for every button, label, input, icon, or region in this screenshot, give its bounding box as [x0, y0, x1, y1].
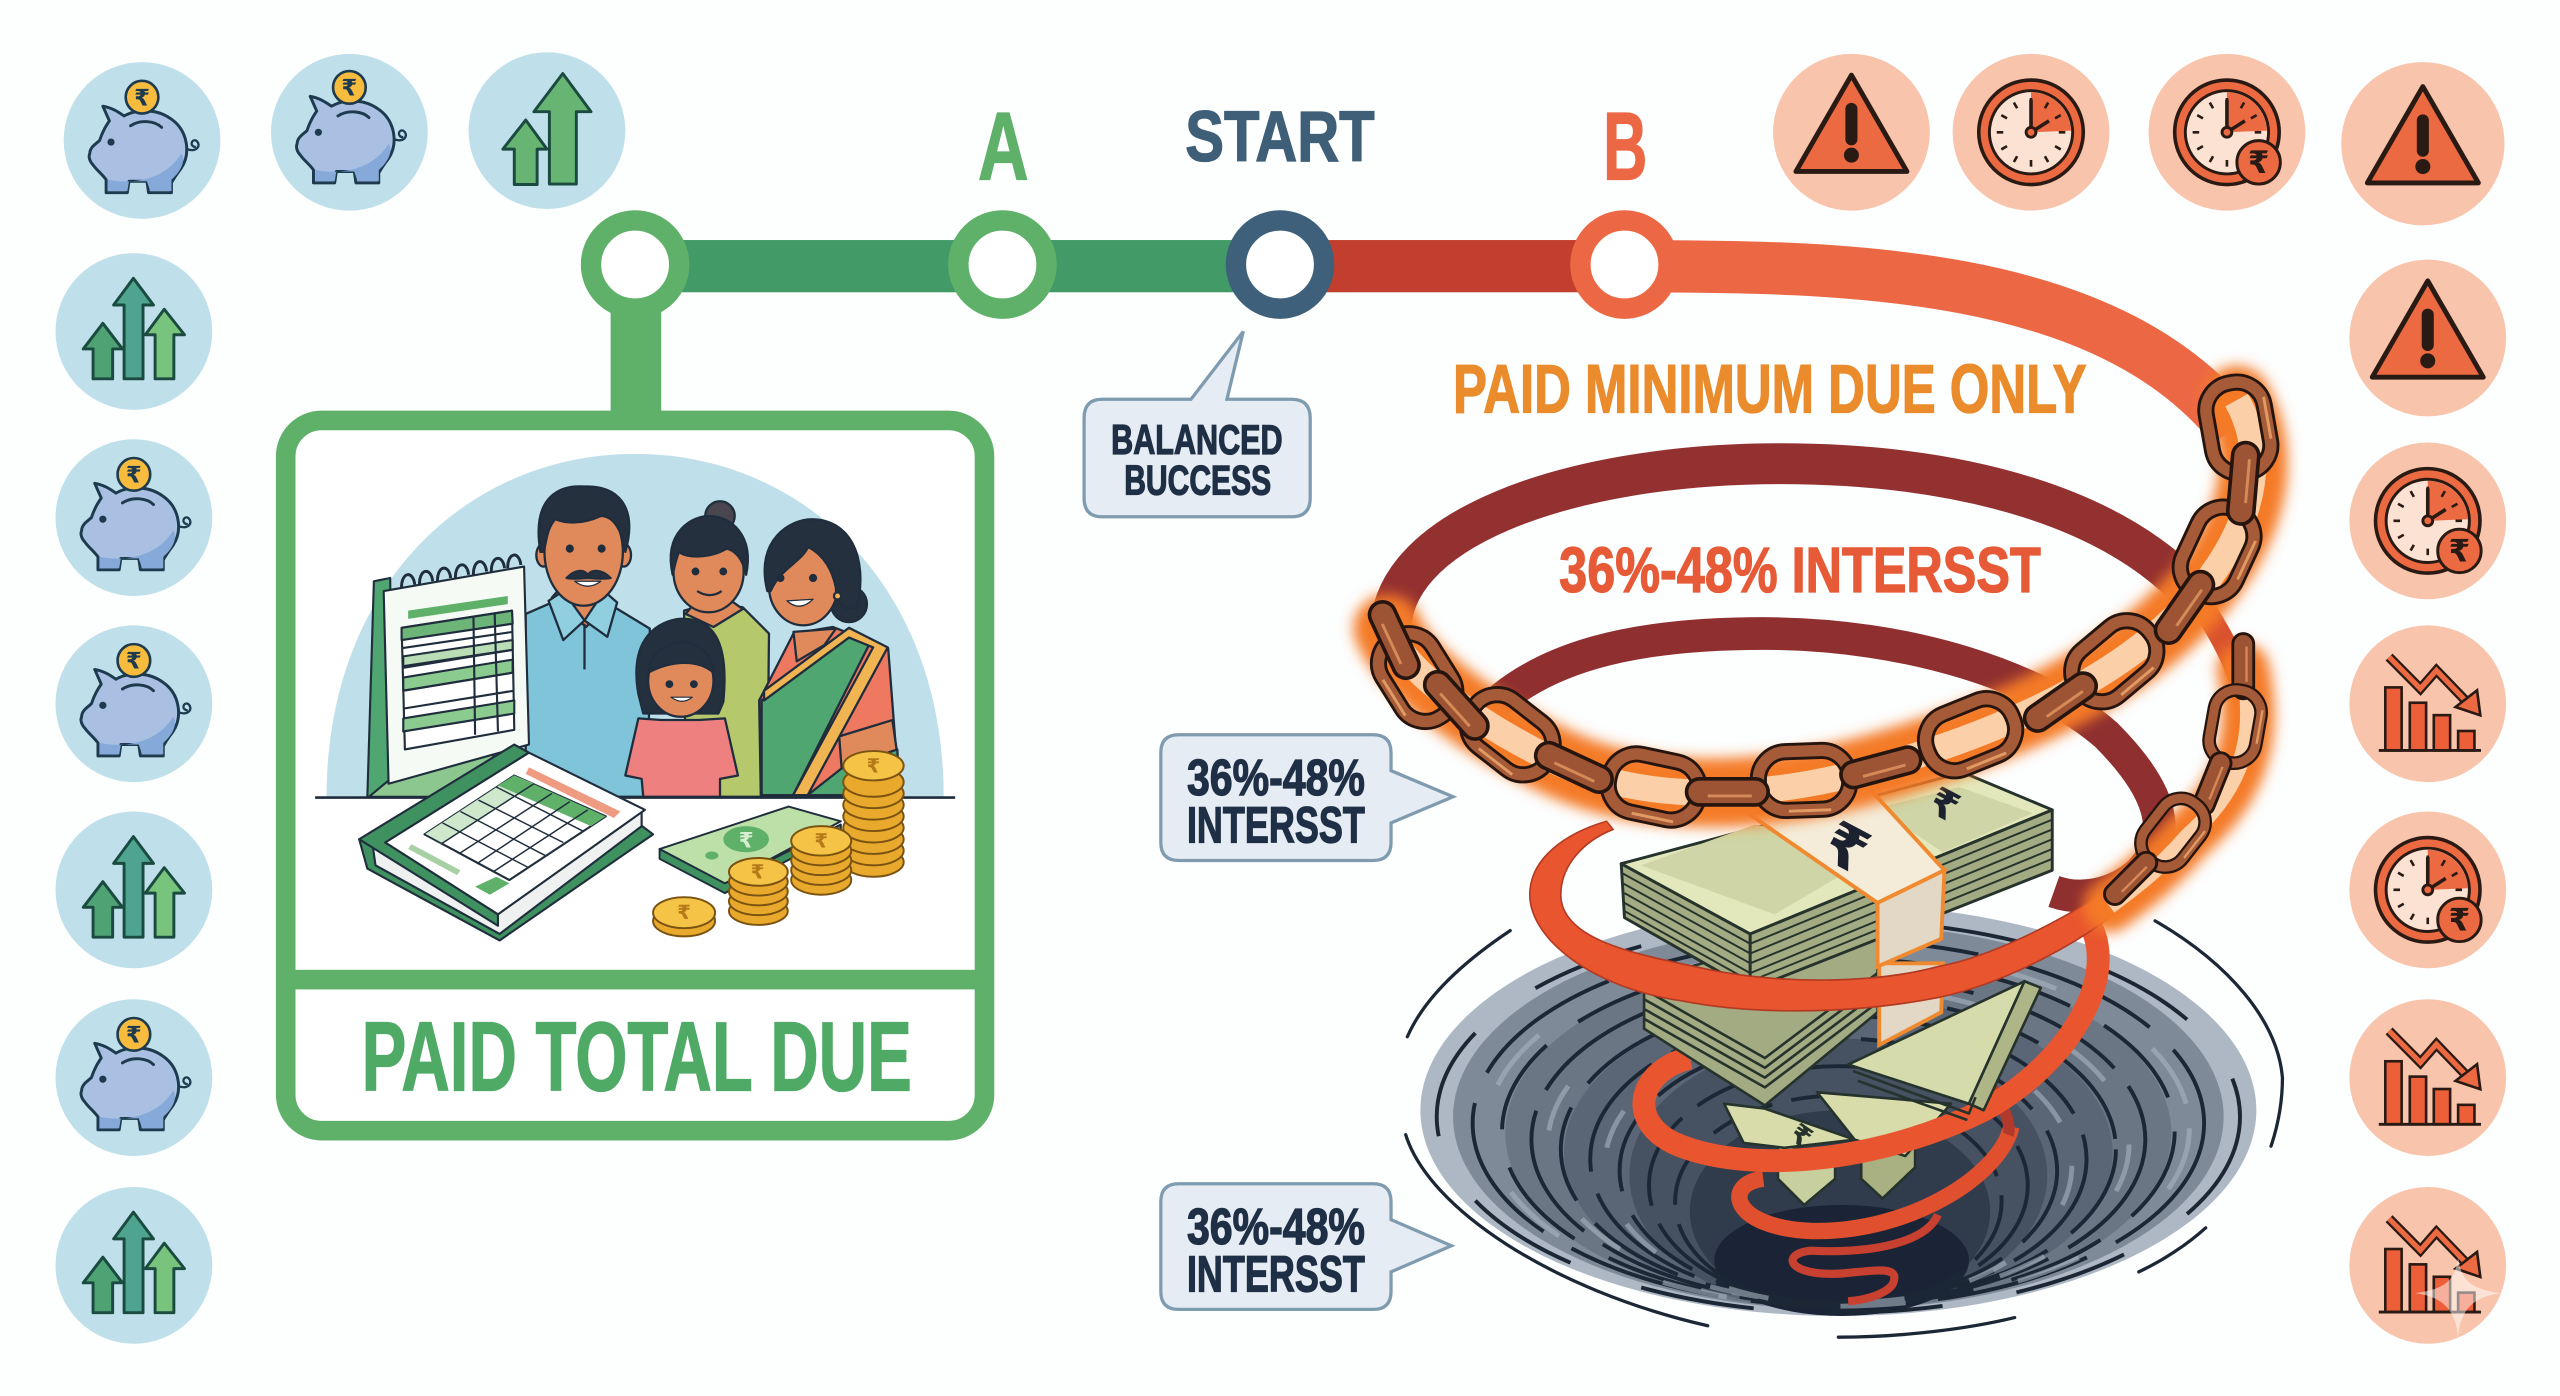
icons: left growth column [56, 52, 625, 1344]
panel frame [286, 420, 984, 1131]
coin rupee marks: ₹ [751, 861, 764, 883]
node: total due end [591, 220, 679, 309]
icon: falling bars 1 [2349, 625, 2506, 782]
heading: paid minimum due only: PAID MINIMUM DUE ONLY [1453, 350, 2087, 427]
icon: piggy bank 2: ₹ [341, 75, 357, 101]
illustration: ledger book [359, 745, 653, 940]
spiral: red strand behind chain [2196, 596, 2247, 735]
money: paper band with rupee: ₹ [1922, 780, 1966, 831]
icon: piggy bank 2 [271, 54, 428, 211]
icon: piggy bank 3 [56, 439, 212, 596]
money: lower loose notes: ₹ [1784, 1118, 1818, 1154]
callout: balanced success: BALANCED [1111, 416, 1283, 463]
icon: clock 1 [1953, 54, 2109, 211]
coin rupee marks: ₹ [867, 755, 880, 777]
spiral: dark red ring top [1391, 464, 2204, 640]
icon: growth arrows [56, 253, 212, 410]
label: START: START [1185, 97, 1375, 177]
money: middle stack [1644, 914, 2041, 1120]
spiral: bottom squiggle [1793, 1215, 1938, 1301]
icon: piggy bank 1: ₹ [134, 84, 150, 110]
money: paper band with rupee: ₹ [1813, 810, 1879, 886]
money: top stack [1621, 772, 2052, 989]
icon: piggy bank 5 [56, 999, 212, 1156]
watermark star [2415, 1257, 2501, 1337]
heading: interest rate: 36%-48% INTERSST [1559, 535, 2041, 606]
backdrop dome [327, 454, 944, 797]
icon: clock with rupee top [2149, 54, 2305, 211]
icon: clock with rupee 2: ₹ [2449, 534, 2470, 569]
connector: green drop to panel [611, 294, 661, 421]
icon: falling bars 2 [2349, 999, 2506, 1156]
spiral: second coil [1644, 914, 2098, 1161]
panel divider [286, 970, 984, 989]
spiral: lower coil [1739, 1127, 2011, 1231]
illustration: calendar [367, 555, 529, 797]
coin rupee marks [677, 755, 880, 924]
illustration: child [625, 619, 738, 797]
illustration: coin stacks [653, 751, 904, 936]
panel: paid total due [286, 420, 984, 1131]
money: lower loose notes [1724, 1092, 1951, 1205]
chain links main strand [1365, 378, 2276, 826]
path line: red segment [1280, 240, 1624, 292]
icon: growth arrows 2 [56, 811, 212, 968]
callout: interest upper [1161, 735, 1453, 860]
callout: interest upper: INTERSST [1187, 796, 1365, 853]
callout: interest lower: INTERSST [1187, 1245, 1365, 1302]
node: A [958, 220, 1047, 309]
icon: growth arrows 3 [56, 1187, 212, 1344]
icon: piggy bank 5: ₹ [126, 1021, 142, 1047]
money: band lower [1879, 963, 1943, 1045]
table edge [315, 797, 955, 799]
icon: piggy bank 4: ₹ [126, 648, 142, 674]
coin rupee marks: ₹ [677, 902, 691, 924]
icon: clock with rupee 2 [2349, 442, 2506, 599]
callout: interest upper: 36%-48% [1187, 749, 1365, 806]
icon: clock with rupee 3: ₹ [2449, 903, 2470, 938]
node: B [1580, 220, 1669, 309]
swirl motion lines [1406, 921, 2282, 1337]
chain [1365, 378, 2276, 909]
icon: warning 2 [2341, 62, 2504, 225]
illustration: teen daughter [671, 501, 769, 797]
node: start [1236, 220, 1324, 309]
icon: piggy bank 1 [64, 62, 220, 219]
callout: balanced success [1084, 331, 1310, 517]
callout: interest lower: 36%-48% [1187, 1198, 1365, 1255]
illustration: man [526, 486, 650, 797]
spiral: front orange ribbon [1530, 821, 2142, 1011]
illustration: banknotes [660, 807, 841, 893]
label: B: B [1603, 94, 1647, 201]
icon: clock with rupee top: ₹ [2248, 145, 2269, 180]
icons: right warning column [1773, 54, 2506, 1344]
path line: orange curve into the spiral [1624, 266, 2233, 428]
callout: interest lower [1161, 1184, 1451, 1309]
chain links second strand [2100, 634, 2265, 909]
coin rupee marks: ₹ [814, 830, 828, 852]
icon: piggy bank 3: ₹ [126, 461, 142, 487]
spiral: dark strand behind notes [1984, 1078, 2009, 1135]
money: paper band with rupee [1750, 780, 1966, 967]
path line: green segment [635, 240, 1280, 292]
icon: piggy bank 4 [56, 625, 212, 782]
icon: clock with rupee 3 [2349, 811, 2506, 968]
panel heading: PAID TOTAL DUE [362, 1002, 912, 1112]
label: A: A [978, 94, 1029, 201]
icon: falling bars 3 [2349, 1187, 2506, 1344]
callout: balanced success: BUCCESS [1124, 457, 1271, 504]
icon: warning 1 [1773, 54, 1930, 211]
illustration: banknotes: ₹ [739, 829, 754, 852]
chain glow [1388, 400, 2253, 906]
illustration: mother [759, 519, 900, 797]
icon: warning 3 [2349, 260, 2506, 416]
spiral: dark red ring middle [1478, 634, 2159, 896]
icon: growth arrows top [469, 52, 625, 209]
whirlpool [1406, 905, 2282, 1337]
